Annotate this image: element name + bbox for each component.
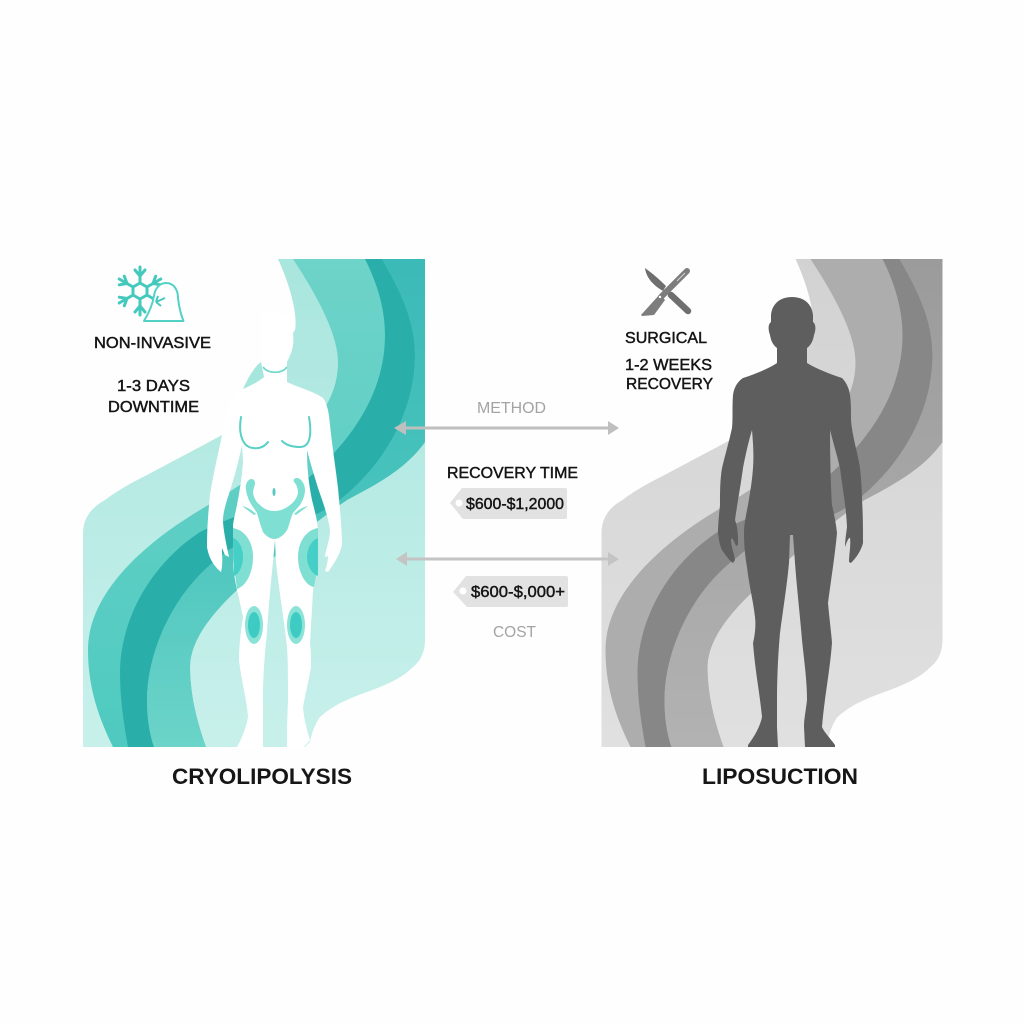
price tag: liposuction: $600-$,000+ (471, 584, 565, 601)
neck line (263, 367, 287, 372)
price tag: liposuction (453, 576, 568, 607)
pivot (659, 296, 661, 298)
blade two (641, 294, 665, 316)
wave background: light teal (83, 259, 425, 747)
panel: liposuction (602, 259, 942, 747)
chest contours (240, 417, 310, 448)
panel: cryolipolysis (83, 259, 425, 747)
cup applicator (144, 283, 184, 321)
label: method: METHOD (477, 400, 546, 417)
icon: snowflake and cup applicator (117, 267, 184, 321)
navel (272, 488, 276, 496)
icon: crossed scalpels (641, 268, 688, 316)
treatment zone: abdomen and pelvis (242, 478, 308, 539)
body silhouette: male (718, 297, 863, 747)
title: cryolipolysis: CRYOLIPOLYSIS (172, 764, 352, 789)
handle two (661, 271, 687, 297)
treatment zone: left knee (245, 606, 263, 644)
arrow: cost (396, 552, 619, 566)
blade one (645, 268, 666, 291)
price tag: cryolipolysis (450, 488, 567, 519)
label: downtime: 1-3 DAYS (117, 378, 190, 395)
wave band: mid grey (664, 259, 942, 747)
wave band: dark teal (120, 259, 415, 747)
body silhouette: female (207, 310, 342, 747)
arrow: method (394, 421, 619, 435)
wave band: medium teal (88, 259, 425, 747)
wave band: medium grey (606, 259, 942, 747)
label: non-invasive: NON-INVASIVE (94, 335, 211, 352)
wave background: light grey (602, 259, 942, 747)
treatment zone: right knee (287, 606, 305, 644)
title: liposuction: LIPOSUCTION (702, 764, 858, 789)
wave band: bright teal (147, 259, 425, 747)
label: cost: COST (493, 624, 536, 641)
handle one (671, 295, 688, 311)
treatment zone: left thigh (233, 528, 253, 589)
cold arrow (156, 296, 165, 306)
label: downtime (108, 378, 199, 416)
wave band: dark grey (638, 259, 932, 747)
handle highlight (677, 273, 685, 281)
wave group: greys (602, 259, 942, 747)
treatment zone: right thigh (298, 528, 318, 587)
label: recovery weeks: 1-2 WEEKS (625, 357, 712, 374)
hair accent (243, 362, 264, 389)
label: recovery weeks: RECOVERY (626, 376, 713, 393)
label: recovery weeks (625, 357, 713, 393)
label: downtime: DOWNTIME (108, 399, 199, 416)
price tag: cryolipolysis: $600-$1,2000 (466, 496, 564, 513)
snowflake (117, 267, 163, 315)
label: recovery time: RECOVERY TIME (447, 465, 578, 482)
label: surgical: SURGICAL (625, 330, 707, 347)
